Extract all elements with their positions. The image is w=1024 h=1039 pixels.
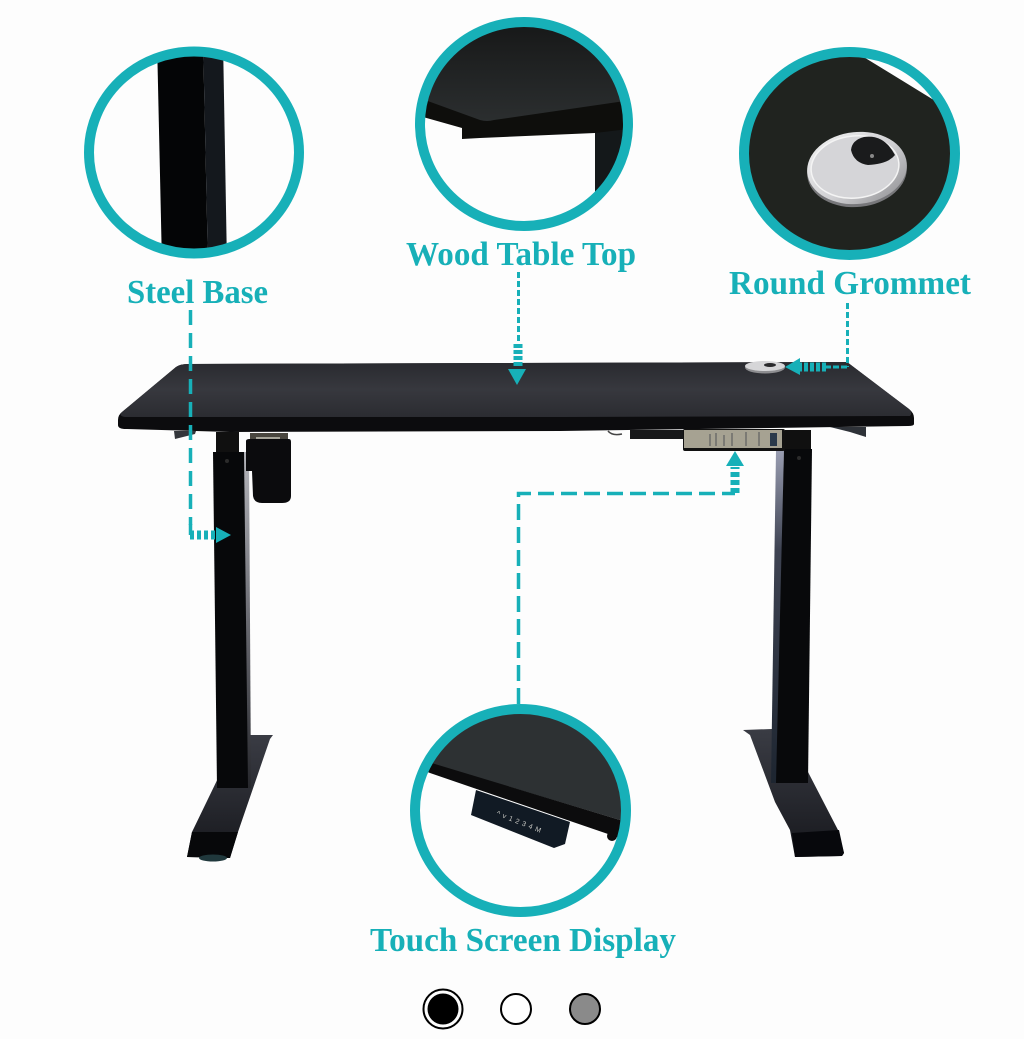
left foot — [187, 735, 273, 862]
left bracket — [174, 431, 196, 439]
panel: wood table top — [405, 5, 645, 273]
heading: round grommet: Round Grommet — [729, 265, 972, 302]
panel: touch screen display — [370, 700, 676, 959]
ring: round grommet — [744, 52, 955, 255]
ring: steel base — [89, 52, 299, 254]
right foot — [743, 729, 844, 857]
left leg — [213, 432, 251, 788]
arrow: touch screen display — [518, 451, 744, 704]
inset: table corner — [425, 27, 623, 192]
swatch: grey — [570, 994, 600, 1024]
right leg — [771, 430, 812, 783]
ring: touch screen display — [415, 709, 626, 912]
inset: control panel — [428, 714, 621, 848]
arrow: steel base — [190, 310, 231, 543]
color options — [424, 990, 600, 1028]
ring: wood table top — [420, 22, 628, 226]
heading: steel base: Steel Base — [127, 274, 268, 311]
panel: steel base — [89, 40, 299, 311]
heading: wood table top: Wood Table Top — [406, 236, 636, 273]
control box — [683, 429, 785, 451]
inset: control panel: ^v1234M — [495, 810, 545, 836]
desk — [118, 361, 914, 862]
swatch: black — [424, 990, 462, 1028]
motor — [246, 433, 291, 503]
heading: touch screen display: Touch Screen Display — [370, 922, 676, 959]
arrow: wood table top — [508, 272, 526, 385]
cable tray — [608, 430, 684, 439]
swatch: white — [501, 994, 531, 1024]
inset: steel column — [158, 56, 227, 248]
inset: grommet closeup — [749, 57, 950, 250]
arrow: round grommet — [785, 303, 848, 375]
mini grommet — [745, 361, 785, 374]
table top — [118, 362, 914, 432]
right bracket — [830, 427, 866, 437]
panel: round grommet — [729, 40, 972, 302]
